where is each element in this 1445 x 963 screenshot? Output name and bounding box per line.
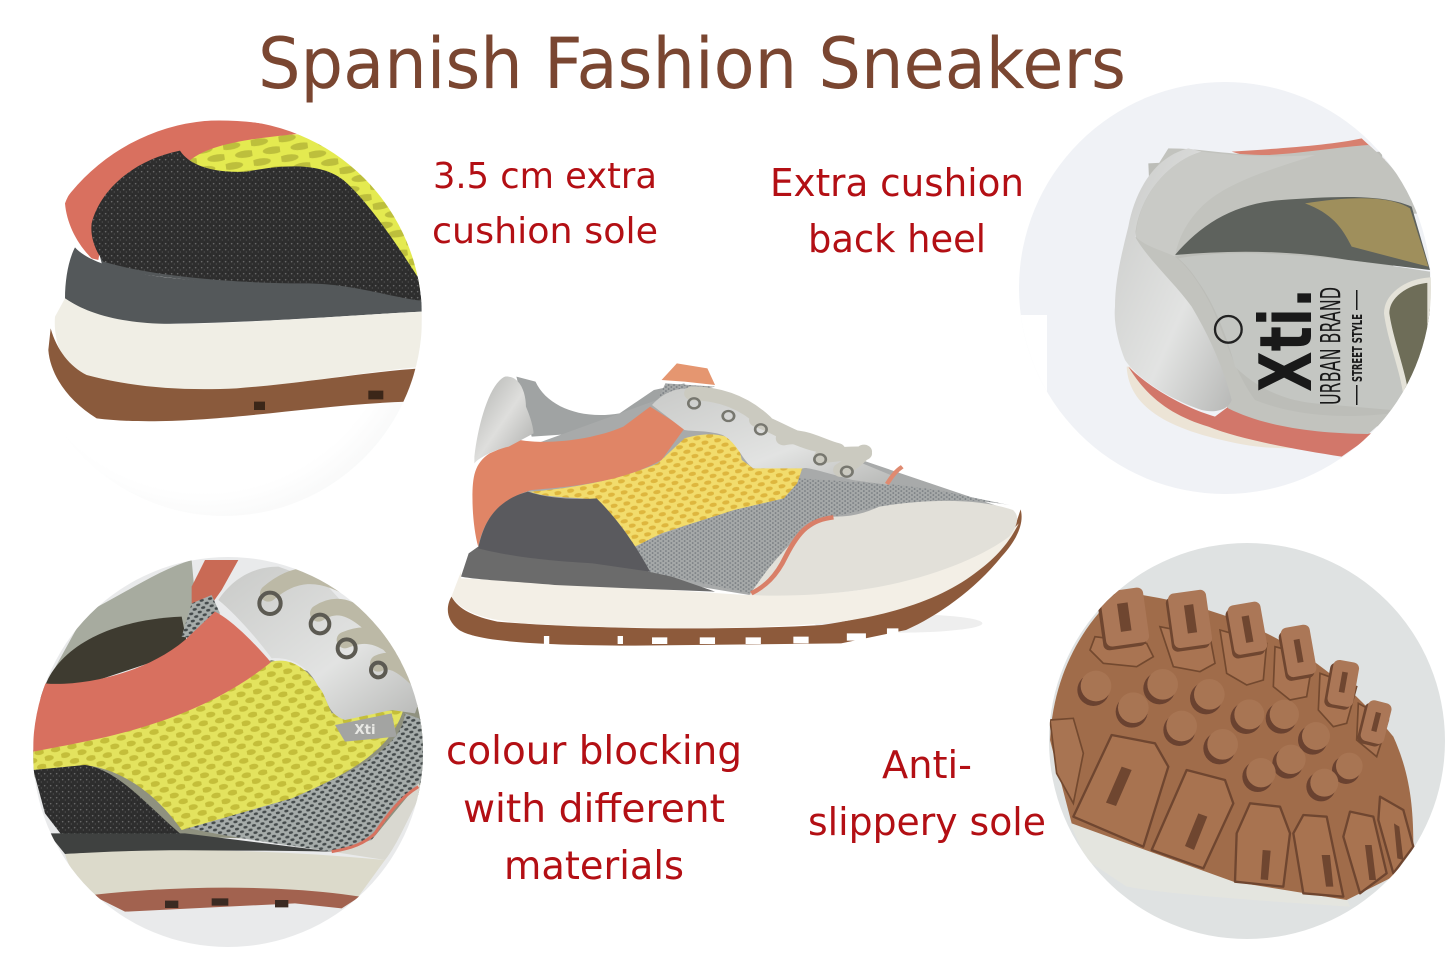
icon: Xti insole logo: Xti. xyxy=(1244,288,1328,392)
icon: coral top edge xyxy=(1232,138,1385,160)
text: back heel: Extra cushion xyxy=(770,161,1024,205)
icon: toe suede xyxy=(749,501,1017,596)
icon: coral stripe xyxy=(751,517,833,593)
panel: back heel close-up xyxy=(1015,82,1431,495)
text: anti-slippery sole xyxy=(808,743,1046,844)
icon: Xti label xyxy=(335,713,397,742)
icon: yellow mesh xyxy=(33,661,403,830)
panel: colour blocking close-up xyxy=(33,557,423,947)
text: anti-slippery sole: slippery sole xyxy=(808,800,1046,844)
icon: grey mesh xyxy=(182,713,423,852)
text: cushion sole: cushion sole xyxy=(432,211,658,252)
icon: sole notches xyxy=(544,628,898,644)
icon: interior shadow xyxy=(1175,197,1430,270)
icon: dark midsole band xyxy=(48,833,332,854)
icon: lower lug slots xyxy=(1106,767,1403,887)
icon: laces xyxy=(268,576,422,683)
text: cushion sole: 3.5 cm extra xyxy=(433,156,657,197)
icon: white midsole xyxy=(55,298,422,391)
panel: outsole close-up xyxy=(1049,543,1445,939)
icon: yellow mesh heel xyxy=(182,134,422,290)
text: back heel xyxy=(770,161,1024,261)
icon: centre studs xyxy=(1077,669,1363,801)
icon: eyelets xyxy=(259,593,386,677)
icon: upper backing xyxy=(478,390,1009,595)
icon: silver heel tab xyxy=(1115,148,1232,411)
icon: mesh collar xyxy=(182,595,220,638)
chart: centre sneaker xyxy=(448,363,1022,646)
icon: dark metallic heel xyxy=(478,492,650,572)
icon: silver eyestay xyxy=(652,388,895,485)
icon: insole xyxy=(1178,253,1430,410)
text: back heel: back heel xyxy=(808,217,986,261)
icon: dark interior xyxy=(38,617,188,700)
text: colour blocking: with different xyxy=(463,787,725,832)
icon: white midsole xyxy=(451,523,1019,628)
icon: background notch xyxy=(1021,315,1047,391)
icon: laces xyxy=(692,393,864,470)
icon: brown outsole xyxy=(92,888,360,912)
text: colour blocking: materials xyxy=(504,844,684,889)
icon: upper lug bases xyxy=(1090,627,1388,757)
icon: upper backing xyxy=(33,660,423,842)
icon: left lug xyxy=(1050,718,1083,803)
icon: Xti insole logo: STREET STYLE xyxy=(1351,314,1366,382)
icon: sole base xyxy=(1050,592,1413,900)
icon: side mesh xyxy=(635,503,833,593)
icon: toe mesh xyxy=(734,478,1017,517)
icon: black metallic panel xyxy=(33,765,182,835)
text: cushion sole xyxy=(432,156,658,252)
panel: heel sole close-up xyxy=(48,120,422,422)
icon: mesh collar highlight xyxy=(1175,254,1176,255)
icon: size badge xyxy=(1215,316,1242,343)
icon: warm interior xyxy=(1305,198,1428,267)
icon: white midsole xyxy=(1070,823,1350,907)
icon: coral heel suede xyxy=(472,407,684,547)
icon: midsole backing xyxy=(92,223,422,307)
icon: tongue xyxy=(192,560,238,604)
icon: toe suede xyxy=(332,783,423,860)
icon: tongue xyxy=(662,363,715,385)
icon: sole notches xyxy=(254,391,383,410)
icon: grey mesh lining xyxy=(1135,145,1420,434)
icon: yellow mesh xyxy=(530,434,803,547)
icon: eyelets xyxy=(688,398,853,477)
icon: insole cut-out xyxy=(1387,280,1430,400)
icon: sole notches xyxy=(165,898,288,908)
icon: coral suede xyxy=(33,612,272,753)
text: colour blocking: colour blocking xyxy=(446,729,742,774)
icon: brown outsole xyxy=(48,328,420,421)
icon: white midsole xyxy=(65,850,385,897)
icon: white midsole xyxy=(1127,367,1292,448)
icon: coral toe accent xyxy=(887,467,902,484)
icon: silver eyestay xyxy=(218,567,423,720)
icon: coral stripe xyxy=(332,787,418,852)
icon: grey collar lining xyxy=(516,377,684,437)
icon: silver heel tab xyxy=(474,377,534,463)
icon: coral lower edge xyxy=(1128,367,1375,457)
icon: upper lugs xyxy=(1096,587,1393,748)
icon: Xti insole logo xyxy=(1256,288,1362,405)
title: Spanish Fashion Sneakers xyxy=(258,23,1126,105)
icon: dark midsole band xyxy=(65,247,422,324)
text: anti-slippery sole: Anti- xyxy=(882,743,972,787)
icon: grey midsole band xyxy=(461,547,715,592)
icon: black metallic panel xyxy=(91,151,422,301)
icon: upper mesh xyxy=(658,383,715,400)
icon: collar backing xyxy=(1148,152,1408,430)
icon: lining xyxy=(54,560,194,668)
text: colour blocking xyxy=(446,729,742,889)
icon: coral suede collar xyxy=(65,121,303,260)
icon: ground shadow xyxy=(814,614,982,633)
icon: Xti label: Xti xyxy=(354,723,376,738)
icon: Xti insole logo: URBAN BRAND xyxy=(1314,287,1347,405)
icon: outsole xyxy=(448,509,1022,646)
icon: lower lugs xyxy=(1073,735,1413,897)
